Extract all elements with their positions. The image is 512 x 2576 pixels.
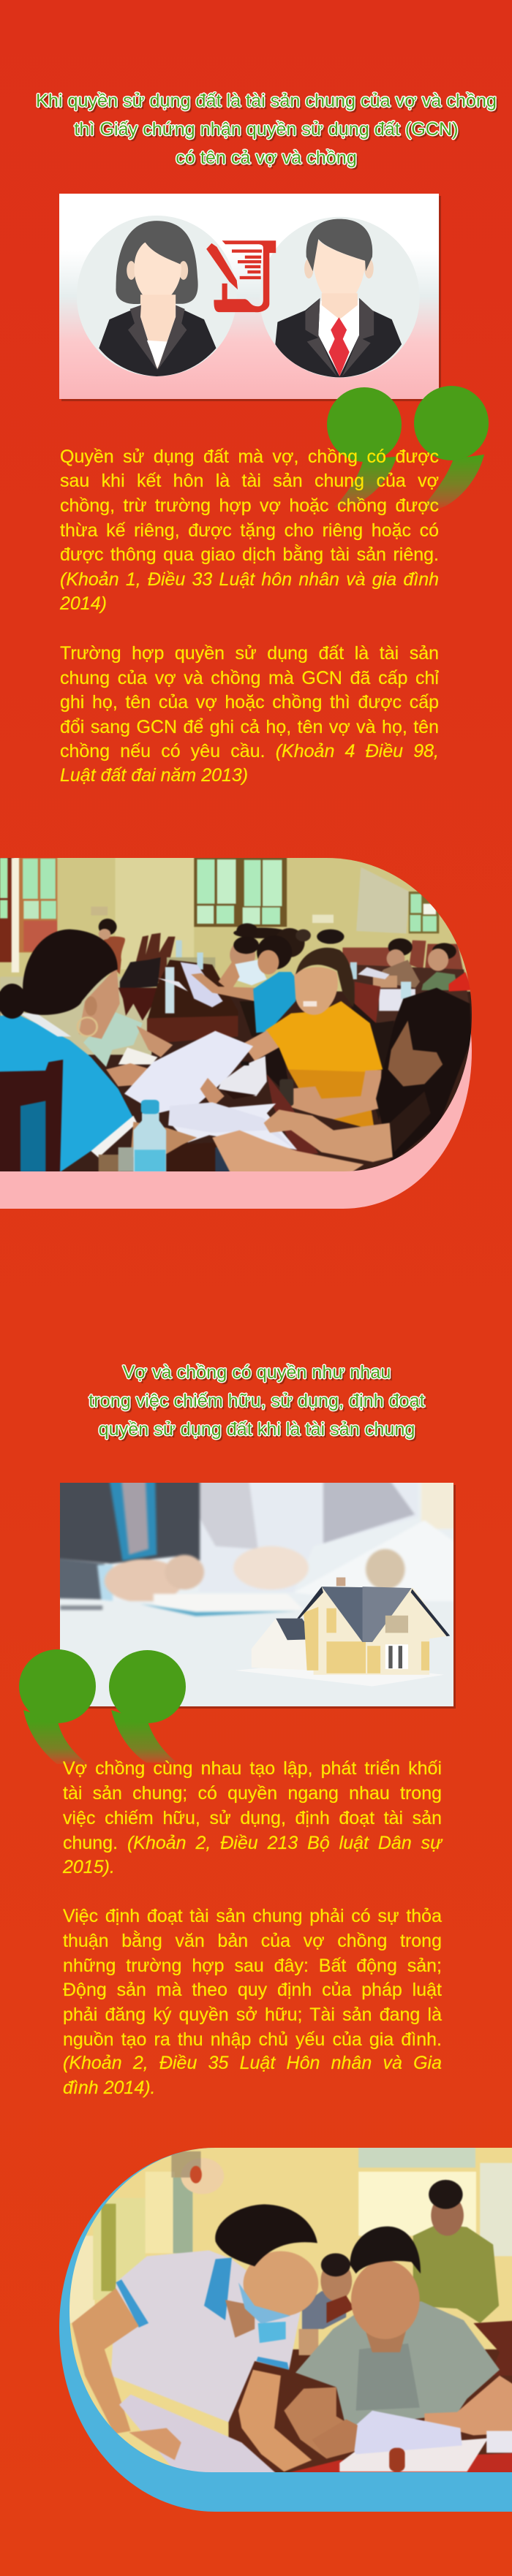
text block: written agreement bbox=[63, 1906, 442, 2098]
heading: section 2 title: quyền sử dụng đất khi là tài sản chung bbox=[99, 1419, 415, 1440]
icon: closing quotation mark bbox=[327, 386, 489, 512]
text block: equal rights: việc chiếm hữu, sử dụng, định đoạt tài sản bbox=[63, 1808, 442, 1828]
text block: written agreement: đình 2014). bbox=[63, 2078, 155, 2098]
text block: equal rights: 2015). bbox=[63, 1857, 115, 1877]
text block: marital land use rights: sau khi kết hôn là tài sản chung của vợ bbox=[60, 471, 439, 491]
text block: certificate reissue: Trường hợp quyền sử dụng đất là tài sản bbox=[60, 643, 439, 664]
photo: officer helping a man with documents bbox=[49, 2137, 512, 2512]
text block: equal rights: chung. (Khoản 2, Điều 213 Bộ luật Dân sự bbox=[63, 1833, 442, 1853]
text block: equal rights: Vợ chồng cùng nhau tạo lập, phát triển khối bbox=[63, 1758, 442, 1779]
heading: section 1 title: thì Giấy chứng nhận quyền sử dụng đất (GCN) bbox=[74, 119, 459, 140]
heading: section 2 title: Vợ và chồng có quyền như nhau bbox=[123, 1362, 391, 1383]
illustration card: husband and wife with certificate bbox=[59, 194, 441, 401]
heading: section 1 title bbox=[36, 91, 498, 170]
text block: certificate reissue: đổi sang GCN để ghi cả họ, tên vợ và họ, tên bbox=[60, 717, 439, 737]
text block: certificate reissue: chồng nếu có yêu cầu. (Khoản 4 Điều 98, bbox=[60, 741, 439, 761]
text block: written agreement: Việc định đoạt tài sản chung phải có sự thỏa bbox=[63, 1906, 442, 1926]
text block: written agreement: những trường hợp sau đây: Bất động sản; bbox=[63, 1956, 442, 1976]
text block: marital land use rights: 2014) bbox=[60, 593, 107, 614]
text block: written agreement: phải đăng ký quyền sở hữu; Tài sản đang là bbox=[63, 2005, 442, 2025]
icon: husband portrait bbox=[260, 217, 420, 378]
icon: opening quotation mark bbox=[19, 1649, 186, 1764]
text block: equal rights bbox=[63, 1758, 443, 1877]
text block: marital land use rights: được thông qua giao dịch bằng tài sản riêng. bbox=[60, 544, 439, 565]
text block: written agreement: thuận bằng văn bản của vợ chồng trong bbox=[63, 1931, 442, 1951]
text block: certificate reissue bbox=[60, 643, 439, 786]
text block: marital land use rights: chồng, trừ trường hợp vợ hoặc chồng được bbox=[60, 495, 439, 516]
text block: written agreement: nguồn tạo ra thu nhập chủ yếu của gia đình. bbox=[63, 2029, 442, 2050]
text block: marital land use rights bbox=[60, 447, 439, 614]
heading: section 1 title: Khi quyền sử dụng đất là tài sản chung của vợ và chồng bbox=[36, 91, 497, 111]
text block: equal rights: tài sản chung; có quyền ngang nhau trong bbox=[63, 1783, 442, 1804]
text block: marital land use rights: thừa kế riêng, được tặng cho riêng hoặc có bbox=[60, 520, 439, 541]
text block: marital land use rights: Quyền sử dụng đất mà vợ, chồng có được bbox=[60, 447, 439, 467]
text block: certificate reissue: ghi họ, tên của vợ hoặc chồng thì được cấp bbox=[60, 692, 439, 713]
text block: certificate reissue: Luật đất đai năm 2013) bbox=[60, 765, 248, 786]
text block: marital land use rights: (Khoản 1, Điều 33 Luật hôn nhân và gia đình bbox=[60, 569, 439, 590]
icon: certificate scroll and pen bbox=[206, 240, 276, 312]
photo: women working with documents in a meeting room bbox=[0, 850, 485, 1209]
text block: written agreement: Động sản mà theo quy định của pháp luật bbox=[63, 1980, 442, 2000]
icon: wife portrait bbox=[77, 216, 237, 376]
text block: written agreement: (Khoản 2, Điều 35 Luật Hôn nhân và Gia bbox=[63, 2053, 442, 2073]
photo: signing contract with model house bbox=[60, 1483, 456, 1709]
heading: section 1 title: có tên cả vợ và chồng bbox=[176, 148, 357, 168]
heading: section 2 title bbox=[88, 1362, 427, 1441]
text block: certificate reissue: chung của vợ và chồng mà GCN đã cấp chỉ bbox=[60, 668, 439, 688]
heading: section 2 title: trong việc chiếm hữu, sử dụng, định đoạt bbox=[89, 1391, 425, 1411]
